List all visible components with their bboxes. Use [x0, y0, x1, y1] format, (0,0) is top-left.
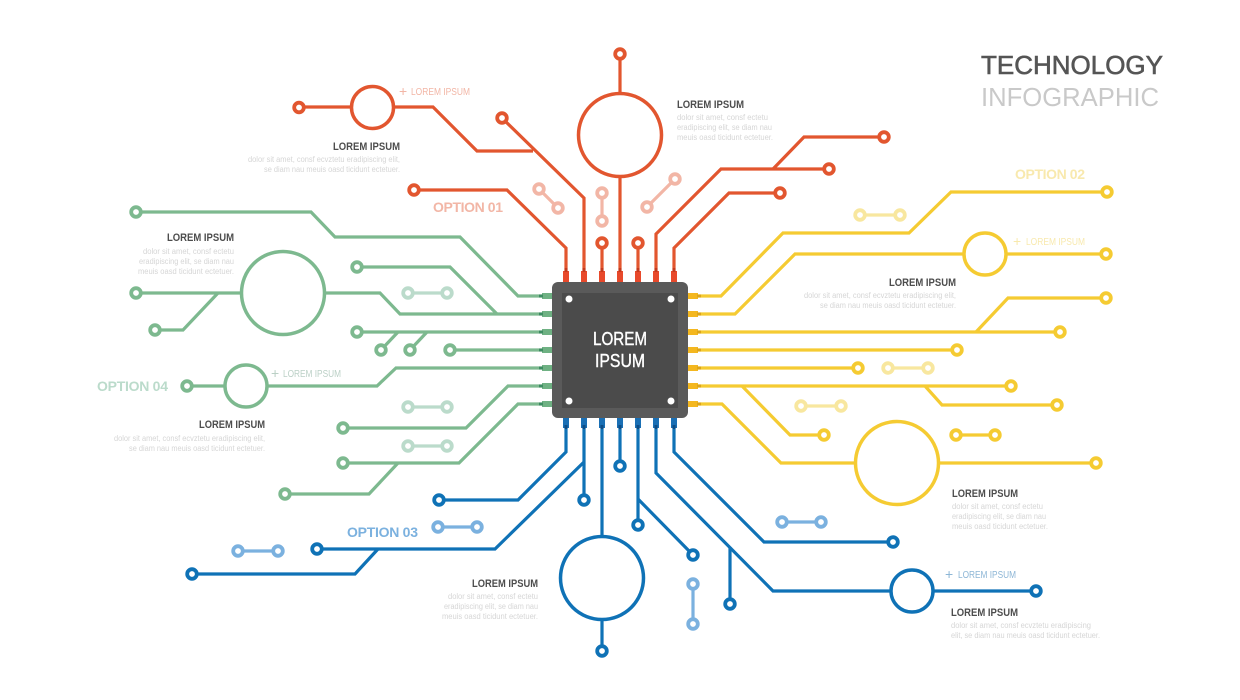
text block: blue right: dolor sit amet, consf ecvztetu eradipiscing — [951, 621, 1091, 630]
plus labels: + — [945, 566, 953, 582]
red pale links — [534, 174, 680, 226]
chip pins — [539, 268, 701, 429]
central chip: IPSUM — [595, 351, 645, 371]
text block: yellow upper — [804, 277, 956, 310]
title: INFOGRAPHIC — [981, 82, 1159, 112]
text block: green upper: dolor sit amet, consf ectetu — [143, 247, 234, 256]
title: TECHNOLOGY — [981, 50, 1163, 80]
panel: option 04 green circuit — [131, 207, 542, 499]
text block: blue left: dolor sit amet, consf ectetu — [448, 592, 538, 601]
text block: top center — [677, 99, 773, 142]
text block: top left: se diam nau meuis oasd ticidunt ectetuer. — [264, 165, 400, 174]
yellow traces — [698, 192, 1107, 463]
plus labels: + — [271, 365, 279, 381]
plus labels: LOREM IPSUM — [411, 87, 470, 98]
plus labels: + — [399, 83, 407, 99]
text block: yellow lower: LOREM IPSUM — [952, 488, 1018, 500]
text block: green upper: meuis oasd ticidunt ectetuer. — [138, 267, 234, 276]
blue nodes — [187, 461, 1041, 656]
text block: yellow lower: dolor sit amet, consf ectetu — [952, 502, 1043, 511]
text block: blue right: elit, se diam nau meuis oasd ticidunt ectetuer. — [951, 631, 1100, 640]
text block: green upper — [138, 232, 234, 276]
text block: top center: dolor sit amet, consf ectetu — [677, 113, 768, 122]
blue pale links — [233, 517, 826, 629]
text block: green lower: LOREM IPSUM — [199, 419, 265, 431]
central chip — [552, 282, 688, 418]
title — [981, 50, 1163, 112]
text block: blue left: meuis oasd ticidunt ectetuer. — [442, 612, 538, 621]
text block: yellow lower: eradipiscing elit, se diam nau — [952, 512, 1046, 521]
text block: green upper: eradipiscing elit, se diam nau — [139, 257, 234, 266]
text block: top left: LOREM IPSUM — [333, 141, 400, 153]
plus labels: + — [1013, 233, 1021, 249]
text block: top left: dolor sit amet, consf ecvztetu eradipiscing elit, — [248, 155, 400, 164]
text block: top left — [248, 141, 400, 174]
text block: blue right: LOREM IPSUM — [951, 607, 1018, 619]
plus labels: LOREM IPSUM — [958, 570, 1016, 581]
green traces — [136, 212, 542, 494]
green pale links — [403, 288, 452, 451]
option labels: OPTION 01 — [433, 199, 503, 215]
option labels: OPTION 04 — [97, 378, 168, 394]
plus labels: LOREM IPSUM — [283, 369, 341, 380]
text block: green lower: dolor sit amet, consf ecvztetu eradipiscing elit, — [114, 434, 265, 443]
text block: green upper: LOREM IPSUM — [167, 232, 234, 244]
red large circles — [352, 86, 662, 176]
text block: green lower — [114, 419, 265, 453]
panel: option 02 yellow circuit — [698, 187, 1112, 504]
text block: blue left: eradipiscing elit, se diam nau — [444, 602, 538, 611]
text block: yellow lower — [952, 488, 1048, 531]
panel: option 03 blue circuit — [187, 428, 1041, 656]
blue large circles — [560, 536, 933, 620]
text block: top center: eradipiscing elit, se diam nau — [677, 123, 772, 132]
yellow pale links — [796, 210, 933, 411]
text block: yellow lower: meuis oasd ticidunt ectetuer. — [952, 522, 1048, 531]
red traces — [299, 54, 884, 272]
green nodes — [131, 207, 455, 499]
text block: blue right — [951, 607, 1100, 640]
red nodes — [294, 49, 889, 248]
text block: blue left: LOREM IPSUM — [472, 578, 538, 590]
central chip: LOREM — [593, 329, 647, 349]
panel: option 01 red circuit — [294, 49, 889, 272]
yellow nodes — [819, 187, 1112, 468]
text block: yellow upper: dolor sit amet, consf ecvztetu eradipiscing elit, — [804, 291, 956, 300]
option labels: OPTION 02 — [1015, 166, 1085, 182]
plus labels: LOREM IPSUM — [1026, 237, 1085, 248]
green large circles — [225, 252, 324, 407]
option labels — [97, 166, 1085, 540]
text block: top center: meuis oasd ticidunt ectetuer. — [677, 133, 773, 142]
plus labels — [271, 83, 1085, 582]
blue traces — [192, 428, 1036, 651]
text block: yellow upper: LOREM IPSUM — [889, 277, 956, 289]
text block: yellow upper: se diam nau meuis oasd ticidunt ectetuer. — [820, 301, 956, 310]
option labels: OPTION 03 — [347, 524, 418, 540]
yellow large circles — [856, 233, 1006, 504]
text block: top center: LOREM IPSUM — [677, 99, 744, 111]
text block: green lower: se diam nau meuis oasd ticidunt ectetuer. — [129, 444, 265, 453]
text block: blue left — [442, 578, 538, 621]
